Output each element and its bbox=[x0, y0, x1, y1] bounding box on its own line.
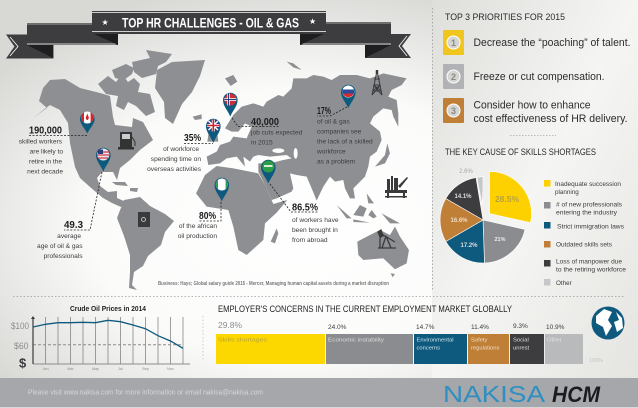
arctic islands bbox=[98, 50, 172, 116]
priority 3: cost effectiveness of HR delivery. bbox=[474, 113, 628, 125]
month labels: May bbox=[92, 367, 99, 371]
legend: # of new professionals bbox=[556, 202, 622, 208]
pie chart: 21% bbox=[494, 237, 506, 243]
text: overseas: of workforce bbox=[163, 146, 199, 153]
chart axes and grid bbox=[31, 316, 190, 364]
icon: oil derrick bbox=[372, 70, 382, 95]
bar percentages bbox=[218, 321, 565, 331]
footer text: Please visit www.nakisa.com for more information or email nakisa@nakisa.com bbox=[28, 390, 263, 396]
bar percentages: 10.9% bbox=[546, 324, 565, 331]
icon: 3: 3 bbox=[451, 106, 456, 116]
stacked bar bbox=[216, 334, 583, 364]
pin: UK bbox=[206, 119, 221, 143]
bar labels: concerns bbox=[416, 346, 440, 352]
text: skilled workforce: of oil & gas bbox=[317, 118, 350, 126]
bar labels: Economic instability bbox=[328, 338, 384, 344]
priority 1 bbox=[443, 30, 630, 55]
pin: Russia bbox=[341, 85, 356, 108]
icon: 3 bbox=[443, 98, 464, 123]
world map bbox=[33, 50, 409, 290]
text: skilled workers: are likely to bbox=[30, 148, 63, 156]
text: skilled workforce: companies see bbox=[317, 128, 362, 136]
stat: 35%: 35% bbox=[184, 132, 202, 144]
priority 3: Consider how to enhance bbox=[474, 100, 590, 112]
text: average age: age of oil & gas bbox=[37, 243, 83, 250]
text: job cuts: job cuts expected bbox=[250, 130, 303, 136]
text: brought in from abroad: from abroad bbox=[292, 237, 328, 244]
pie chart: 2.6% bbox=[459, 169, 473, 175]
dollar icon: $ bbox=[19, 356, 27, 370]
month labels: Nov bbox=[167, 367, 174, 371]
australia bbox=[357, 227, 409, 269]
svalbard and arctic bbox=[225, 62, 302, 86]
priority 2 bbox=[443, 64, 604, 89]
text: skilled workforce: as a problem bbox=[317, 158, 356, 166]
stat: 190,000: 190,000 bbox=[29, 124, 62, 136]
british isles, iceland bbox=[193, 114, 218, 142]
legend: entering the industry bbox=[556, 210, 618, 217]
text: overseas: spending time on bbox=[151, 156, 201, 163]
pin: USA bbox=[96, 148, 111, 172]
south america bbox=[117, 197, 174, 290]
icon: 2: 2 bbox=[451, 72, 456, 82]
caribbean bbox=[112, 182, 138, 192]
icon: 1 bbox=[443, 30, 464, 55]
banner star right: ★ bbox=[309, 17, 316, 26]
indonesia and philippines bbox=[337, 193, 400, 223]
stat: 40,000: 40,000 bbox=[251, 116, 279, 128]
bar percentages: 29.8% bbox=[218, 321, 242, 330]
text: african oil: of the african bbox=[179, 223, 217, 230]
pin: Canada bbox=[80, 112, 95, 134]
divider bbox=[13, 296, 625, 298]
footer band bbox=[0, 378, 638, 408]
legend: to the retiring workforce bbox=[556, 267, 627, 274]
inland seas bbox=[272, 148, 298, 159]
banner title: TOP HR CHALLENGES - OIL & GAS bbox=[122, 14, 299, 30]
priority 2: Freeze or cut compensation. bbox=[474, 71, 604, 83]
text: african oil: oil production bbox=[178, 233, 217, 240]
north america bbox=[33, 79, 153, 207]
heading: employer's concerns: EMPLOYER'S CONCERNS IN THE CURRENT EMPLOYMENT MARKET GLOBALLY bbox=[218, 304, 512, 314]
y axis labels bbox=[11, 321, 29, 352]
text: average age: professionals bbox=[44, 253, 83, 260]
stat: 49.3: 49.3 bbox=[64, 219, 83, 231]
bar labels bbox=[218, 338, 562, 352]
chart title: Crude Oil Prices in 2014 bbox=[70, 304, 147, 313]
panel: crude oil line chart bbox=[11, 304, 190, 371]
pie chart: 28.5% bbox=[495, 194, 519, 204]
stat: 86.5%: 86.5% bbox=[292, 202, 319, 214]
bar percentages: 24.0% bbox=[328, 324, 347, 331]
100% label: 100% bbox=[589, 358, 603, 364]
bar labels: Safety bbox=[471, 338, 488, 344]
legend: Strict immigration laws bbox=[557, 224, 624, 230]
location: Norway bbox=[223, 93, 303, 146]
pie chart bbox=[440, 169, 532, 263]
price line bbox=[33, 320, 183, 348]
location: Nigeria bbox=[178, 178, 229, 240]
text: skilled workers: next decade bbox=[27, 168, 63, 176]
icon: 2 bbox=[443, 64, 464, 89]
legend: Loss of manpower due bbox=[556, 258, 623, 266]
month labels: Jul bbox=[118, 367, 123, 371]
panel: skills shortages bbox=[440, 147, 627, 287]
heading: priorities: TOP 3 PRIORITIES FOR 2015 bbox=[445, 12, 565, 22]
bar labels: Social bbox=[513, 338, 529, 344]
icon: offshore rig bbox=[385, 176, 408, 198]
icon: 1: 1 bbox=[451, 38, 456, 48]
priority 1: Decrease the “poaching” of talent. bbox=[474, 37, 630, 49]
legend: Other bbox=[556, 280, 572, 287]
legend: Outdated skills sets bbox=[556, 242, 612, 248]
text: skilled workers: skilled workers bbox=[19, 138, 63, 146]
text: skilled workers: retire in the bbox=[29, 158, 62, 166]
icon: fuel pump bbox=[118, 132, 135, 150]
pin: Norway bbox=[223, 93, 238, 116]
icon: oil barrel bbox=[138, 212, 150, 227]
bar labels: Other bbox=[547, 338, 562, 344]
greenland bbox=[155, 60, 205, 124]
icon: globe bbox=[592, 306, 624, 340]
banner stars: ★ bbox=[102, 18, 109, 27]
location: Russia bbox=[316, 85, 373, 166]
text: skilled workforce: workforce bbox=[316, 148, 346, 156]
eurasia bbox=[193, 62, 409, 277]
bar labels: Skills shortages bbox=[218, 338, 267, 344]
location: USA bbox=[37, 148, 111, 260]
y axis labels: $100 bbox=[11, 321, 29, 332]
heading: skills shortages: THE KEY CAUSE OF SKILLS SHORTAGES bbox=[445, 147, 596, 157]
pie chart: 17.2% bbox=[460, 243, 478, 249]
pie chart: 16.6% bbox=[450, 218, 468, 224]
bar percentages: 9.3% bbox=[513, 323, 528, 330]
bar labels: unrest bbox=[513, 346, 530, 352]
month labels: Sep bbox=[142, 367, 149, 371]
panel: employer's concerns bbox=[216, 304, 624, 364]
source note: Business: Hays; Global salary guide 2015 - Mercer, Managing human capital assets during a market disruption bbox=[158, 281, 389, 287]
divider bbox=[432, 8, 434, 290]
legend bbox=[544, 180, 627, 287]
text: skilled workforce: the lack of a skilled bbox=[317, 138, 373, 146]
month labels: Jan bbox=[42, 367, 49, 371]
location: Saudi Arabia bbox=[261, 160, 339, 244]
bar percentages: 14.7% bbox=[416, 324, 435, 331]
location: UK bbox=[147, 119, 221, 173]
priority 3 bbox=[443, 98, 628, 125]
legend: planning bbox=[555, 189, 579, 196]
text: brought in from abroad: of workers have bbox=[292, 217, 339, 224]
logo: Nakisa HCM: HCM bbox=[552, 382, 601, 407]
japan bbox=[375, 143, 390, 167]
stat: 80%: 80% bbox=[199, 210, 217, 222]
y axis labels: $60 bbox=[14, 341, 28, 352]
pin: Nigeria bbox=[214, 178, 229, 202]
month labels bbox=[42, 367, 174, 371]
bar percentages: 11.4% bbox=[471, 324, 489, 331]
bar labels: Environmental bbox=[416, 338, 454, 344]
title banner bbox=[7, 11, 411, 58]
month labels: Mar bbox=[67, 367, 75, 371]
legend: Inadequate succession bbox=[555, 181, 622, 188]
location: Canada bbox=[19, 112, 95, 176]
logo: Nakisa HCM: NAKISA bbox=[443, 381, 546, 407]
madagascar bbox=[271, 228, 278, 243]
logo: Nakisa HCM bbox=[443, 381, 601, 407]
icon: pumpjack bbox=[378, 230, 396, 248]
text: brought in from abroad: been brought in bbox=[292, 227, 338, 234]
text: job cuts: in 2015 bbox=[251, 140, 273, 146]
stat: 17%: 17% bbox=[317, 105, 331, 117]
panel: top 3 priorities bbox=[443, 12, 630, 136]
text: overseas: overseas activities bbox=[147, 166, 202, 173]
bar labels: regulations bbox=[471, 346, 499, 352]
africa bbox=[196, 166, 287, 255]
pie chart: 14.1% bbox=[454, 194, 472, 200]
pin: Saudi Arabia bbox=[261, 160, 276, 184]
text: average age: average bbox=[57, 233, 81, 240]
